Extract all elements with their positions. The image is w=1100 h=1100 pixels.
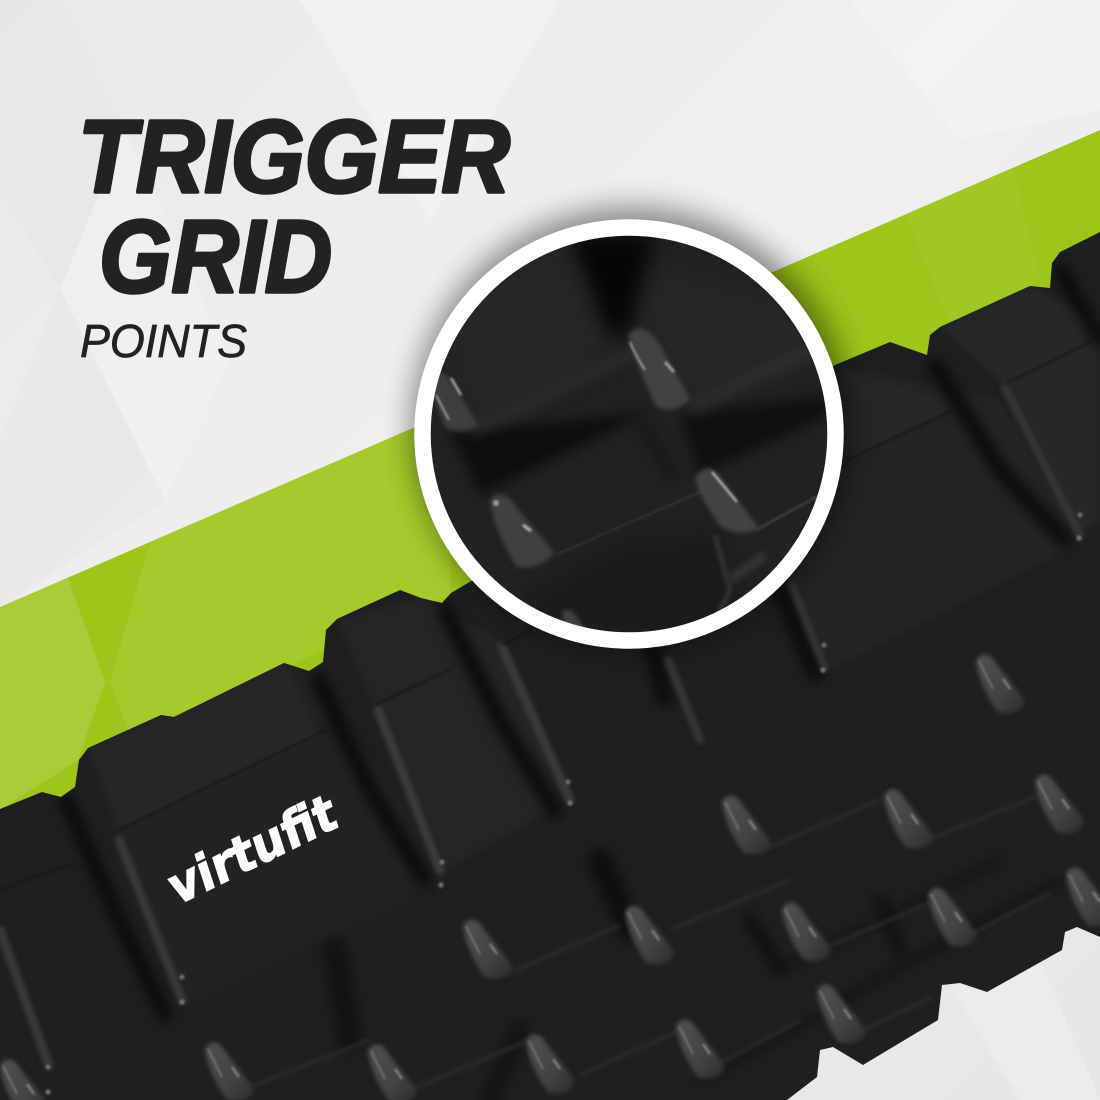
roller block faces: [88, 286, 1034, 748]
subtitle: points: POINTS: [80, 315, 247, 367]
lower block edge lines: [329, 893, 1048, 1062]
long ridge highlights: [0, 388, 1080, 1066]
foam roller: [0, 232, 1100, 1100]
title: [78, 99, 510, 367]
block seam lines: [122, 344, 1086, 828]
lens nub: upper left: [430, 373, 478, 431]
lens close-up texture: [434, 236, 826, 627]
dark grooves: [66, 270, 1100, 1100]
lens nub: lower left: [490, 494, 554, 568]
lens nub: bottom: [561, 608, 585, 627]
title line: grid: GRID: [99, 199, 332, 314]
circle drop shadow: [412, 208, 852, 648]
title line: trigger: TRIGGER: [78, 99, 510, 214]
lens nub: upper right: [628, 328, 690, 410]
green diagonal band: [0, 130, 1100, 830]
magnified lens: [420, 225, 840, 645]
brand logo: virtufit: [161, 781, 343, 917]
ridge end glints: [45, 513, 1082, 1095]
lens white ring: [422, 228, 836, 640]
lens nub: lower right: [695, 468, 759, 533]
roller nubs: [0, 654, 1100, 1100]
